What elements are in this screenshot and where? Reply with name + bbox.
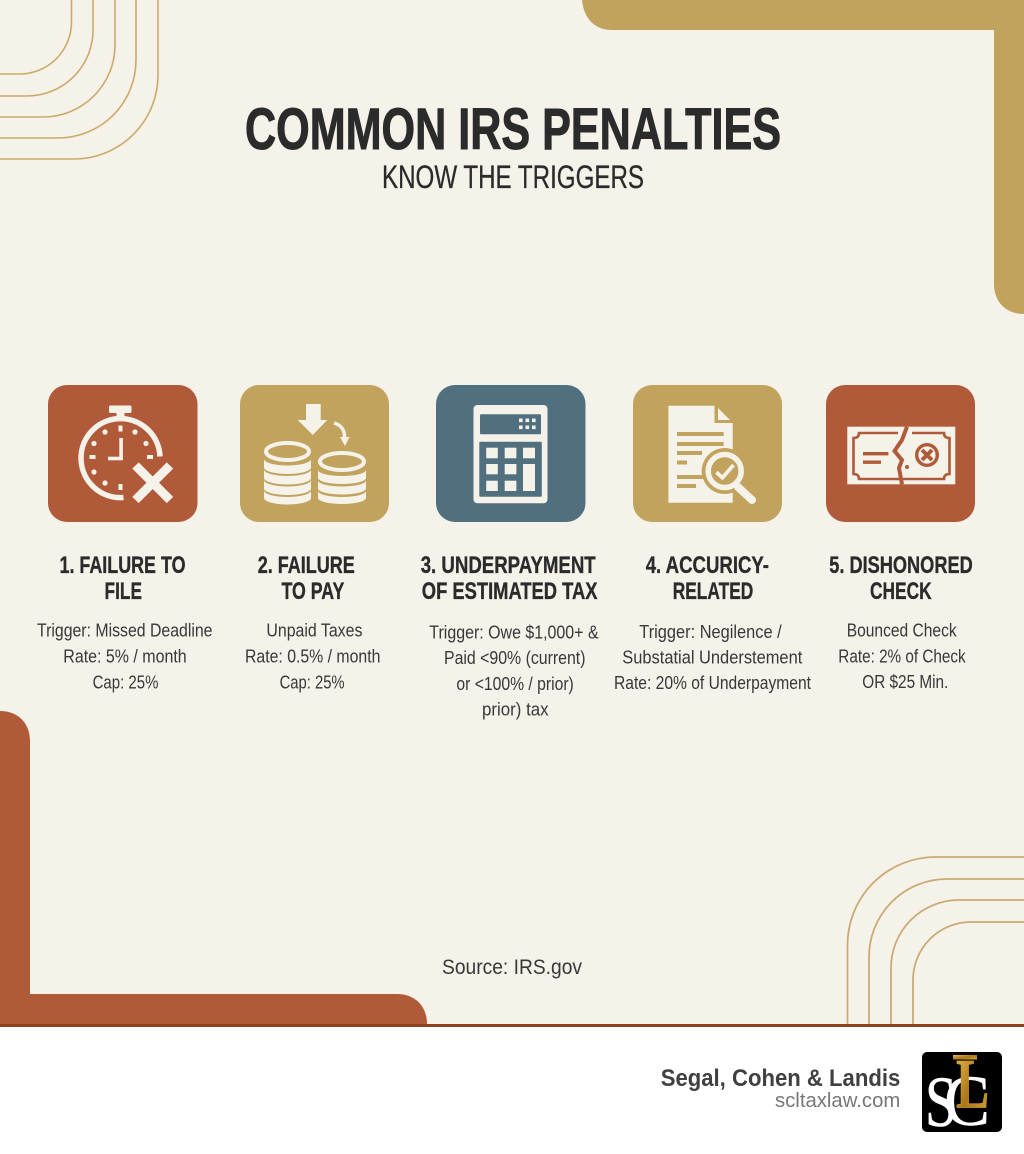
heading: TO PAY (282, 578, 344, 605)
details: Trigger: Owe $1,000+ & (429, 622, 599, 642)
details: prior) tax (482, 698, 549, 720)
heading: OF ESTIMATED TAX (422, 578, 598, 605)
panel: accuracy-related (614, 385, 811, 693)
details: Rate: 5% / month (63, 646, 187, 666)
details: Cap: 25% (280, 672, 345, 692)
details: Trigger: Missed Deadline (37, 620, 212, 640)
firm name: Segal, Cohen & Landis (661, 1065, 900, 1092)
details (614, 621, 811, 693)
details (838, 620, 966, 692)
corner lines: top left (0, 0, 158, 159)
icon: torn check (826, 385, 975, 522)
details: Bounced Check (847, 620, 957, 640)
heading (421, 552, 598, 605)
logo: S (925, 1062, 957, 1142)
corner lines: bottom right (848, 857, 1024, 1024)
panel: underpayment of estimated tax (421, 385, 599, 720)
details: Trigger: Negilence / (639, 621, 782, 642)
heading: CHECK (870, 578, 932, 605)
logo: C (944, 1061, 990, 1141)
details: OR $25 Min. (862, 671, 948, 692)
panel: dishonored check (826, 385, 975, 692)
details: Rate: 0.5% / month (245, 646, 380, 666)
heading: 3. UNDERPAYMENT (421, 552, 596, 579)
panel: failure to file (37, 385, 212, 692)
heading (646, 552, 769, 605)
details: Substatial Understement (622, 646, 802, 668)
icon: coin stacks with arrows (240, 385, 389, 522)
heading (258, 552, 355, 605)
details (429, 622, 599, 720)
details: or <100% / prior) (456, 673, 574, 694)
footer (0, 1024, 1024, 1154)
corner accent: gold top right (582, 0, 1024, 314)
heading: 1. FAILURE TO (60, 552, 186, 579)
logo (922, 1046, 1002, 1142)
details (37, 620, 212, 692)
heading: 2. FAILURE (258, 552, 355, 579)
details: Rate: 20% of Underpayment (614, 672, 811, 693)
firm website: scltaxlaw.com (775, 1090, 900, 1112)
subtitle: KNOW THE TRIGGERS (382, 159, 644, 195)
heading: RELATED (673, 578, 753, 605)
corner accent: rust bottom left (0, 711, 427, 1024)
details: Unpaid Taxes (266, 620, 362, 640)
panel: failure to pay (240, 385, 389, 692)
logo: L (956, 1046, 989, 1124)
details: Paid <90% (current) (444, 647, 586, 668)
title: COMMON IRS PENALTIES (245, 97, 781, 162)
heading: FILE (104, 578, 142, 605)
icon: document with magnifier (633, 385, 782, 522)
heading (829, 552, 973, 605)
details (245, 620, 380, 692)
details: Rate: 2% of Check (838, 646, 966, 666)
icon: calculator (436, 385, 586, 522)
source note: Source: IRS.gov (442, 956, 582, 979)
icon: stopwatch with x (48, 385, 198, 522)
heading (60, 552, 186, 605)
heading: 4. ACCURICY- (646, 552, 769, 579)
details: Cap: 25% (93, 672, 158, 692)
heading: 5. DISHONORED (829, 552, 973, 579)
